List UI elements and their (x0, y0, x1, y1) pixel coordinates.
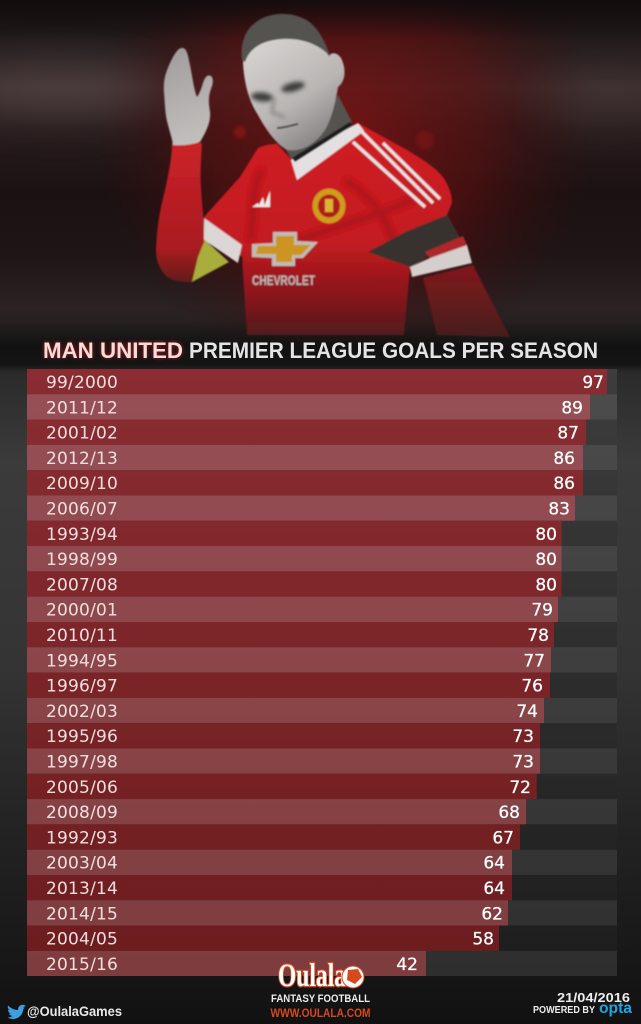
row 2013/14: 64 (483, 879, 505, 899)
shirt body (204, 123, 460, 335)
shirt folds (250, 170, 412, 300)
icon: twitter bird (8, 1005, 26, 1019)
row 1998/99: 1998/99 (46, 550, 118, 570)
row 2006/07: 83 (548, 500, 570, 520)
row 2002/03: 74 (516, 702, 538, 722)
collar (291, 123, 364, 180)
row 2004/05 (27, 926, 617, 951)
row 99/2000: 97 (582, 373, 604, 393)
row 1994/95 (27, 647, 617, 673)
raised hand (164, 48, 213, 145)
row 1995/96: 73 (512, 727, 534, 747)
row 2004/05: 58 (472, 930, 494, 950)
row 1996/97: 76 (521, 677, 543, 697)
title highlight: club name: MAN UNITED (43, 338, 183, 363)
row 1995/96: 1995/96 (46, 727, 118, 747)
row 2015/16 (27, 951, 617, 976)
date: 21/04/2016 (557, 991, 630, 1005)
row 2001/02: 87 (557, 424, 579, 444)
nose and mouth (272, 98, 298, 128)
website: WWW.OULALA.COM (270, 1008, 370, 1020)
row 2004/05: 2004/05 (46, 930, 118, 950)
row 2011/12 (27, 394, 617, 420)
row 2014/15: 2014/15 (46, 904, 118, 924)
adidas logo (252, 191, 270, 207)
row 2014/15: 62 (481, 904, 503, 924)
row 99/2000 (27, 369, 617, 394)
row 2011/12: 2011/12 (46, 398, 118, 418)
twitter handle: @OulalaGames (27, 1004, 122, 1019)
row 2001/02: 2001/02 (46, 424, 118, 444)
row 1995/96 (27, 723, 617, 748)
row 2015/16: 2015/16 (46, 955, 118, 975)
white cuff (204, 218, 242, 263)
forearm on far side (423, 265, 510, 337)
title (43, 338, 598, 363)
raised arm sleeve (156, 143, 205, 282)
row 2015/16: 42 (396, 955, 418, 975)
row 2001/02 (27, 420, 617, 445)
black armband (368, 215, 460, 267)
row 2005/06: 72 (509, 778, 531, 798)
row 2012/13 (27, 445, 617, 470)
row 1997/98: 1997/98 (46, 752, 118, 772)
row 2000/01: 2000/01 (46, 601, 118, 621)
row 2009/10: 86 (553, 474, 575, 494)
row 2009/10 (27, 470, 617, 496)
row 2012/13: 2012/13 (46, 449, 118, 469)
row 2010/11: 2010/11 (46, 626, 118, 646)
row 2002/03 (27, 698, 617, 723)
captain armband (192, 240, 229, 282)
powered by: POWERED BY (533, 1004, 595, 1016)
club crest (312, 188, 346, 224)
row 2008/09: 2008/09 (46, 803, 118, 823)
row 1994/95: 1994/95 (46, 651, 118, 671)
row 1997/98 (27, 748, 617, 774)
head (243, 38, 345, 150)
neck shadow (284, 95, 352, 160)
row 2011/12: 89 (561, 398, 583, 418)
row 2003/04 (27, 850, 617, 875)
white sleeve band (410, 245, 472, 277)
row 1997/98: 73 (512, 752, 534, 772)
row 1998/99 (27, 546, 617, 571)
logo: Oulala: Oulala (278, 958, 346, 994)
row 1993/94 (27, 521, 617, 546)
row 2000/01 (27, 597, 617, 622)
row 1993/94: 1993/94 (46, 525, 118, 545)
row 2009/10: 2009/10 (46, 474, 118, 494)
eyes and brows (251, 80, 306, 103)
chevrolet wordmark: CHEVROLET (252, 273, 316, 288)
row 2002/03: 2002/03 (46, 702, 118, 722)
row 2003/04: 2003/04 (46, 854, 118, 874)
player photo: captain in red shirt waving (156, 14, 510, 337)
row 2008/09 (27, 799, 617, 824)
row 2008/09: 68 (498, 803, 520, 823)
row 2003/04: 64 (483, 854, 505, 874)
row 1994/95: 77 (523, 651, 545, 671)
row 1996/97: 1996/97 (46, 677, 118, 697)
row 2007/08: 2007/08 (46, 575, 118, 595)
row 1992/93 (27, 824, 617, 850)
row 1992/93: 67 (492, 828, 514, 848)
row 99/2000: 99/2000 (46, 373, 118, 393)
row 2010/11: 78 (527, 626, 549, 646)
row 1992/93: 1992/93 (46, 828, 118, 848)
row 2013/14 (27, 875, 617, 900)
opta logo: opta (599, 1000, 632, 1017)
title highlight: club name: MAN UNITED (43, 338, 183, 363)
row 2006/07 (27, 496, 617, 521)
logo strapline: FANTASY FOOTBALL (271, 993, 370, 1005)
hair (242, 14, 330, 62)
row 2006/07: 2006/07 (46, 500, 118, 520)
row 2000/01: 79 (531, 601, 553, 621)
bar chart: goals per season (27, 369, 617, 976)
row 2010/11 (27, 622, 617, 647)
row 2007/08 (27, 571, 617, 597)
shoulder stripes (353, 132, 440, 207)
row 1998/99: 80 (535, 550, 557, 570)
title remainder: PREMIER LEAGUE GOALS PER SEASON (189, 338, 598, 363)
row 1996/97 (27, 673, 617, 698)
row 2014/15 (27, 900, 617, 926)
chevrolet bowtie (252, 232, 318, 266)
row 2007/08: 80 (535, 575, 557, 595)
icon: football in logo (342, 966, 364, 988)
row 2013/14: 2013/14 (46, 879, 118, 899)
row 2005/06 (27, 774, 617, 799)
row 2012/13: 86 (553, 449, 575, 469)
row 1993/94: 80 (535, 525, 557, 545)
row 2005/06: 2005/06 (46, 778, 118, 798)
